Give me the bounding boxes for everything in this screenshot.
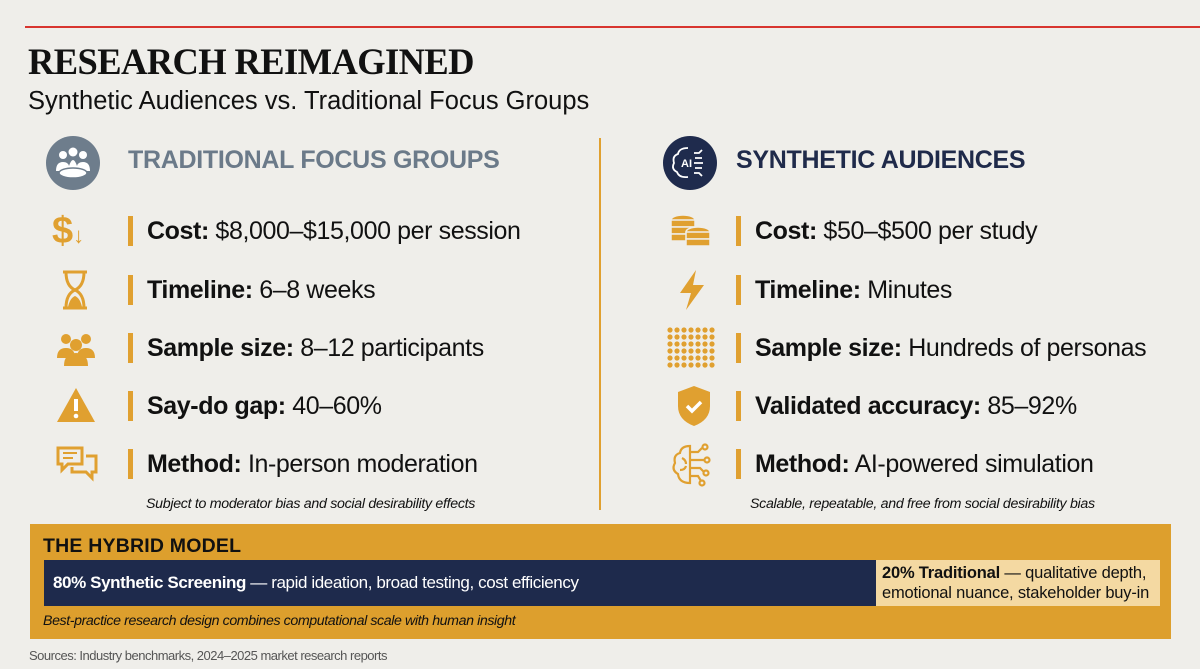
row: sample: Sample size: Hundreds of personas [755, 334, 1146, 362]
note: Best-practice research design combines computational scale with human insight [43, 613, 515, 629]
icon: people [46, 136, 100, 190]
icon: coins [672, 216, 710, 246]
icon: shield [678, 386, 710, 426]
icon: AI brain [663, 136, 717, 190]
bar: 20% traditional: 20% Traditional — qualitative depth, [882, 564, 1146, 582]
icon: brain circuit [672, 443, 711, 487]
row: method: Method: AI-powered simulation [755, 450, 1094, 478]
bar: 80% synthetic: 80% Synthetic Screening — rapid ideation, broad testing, cost efficiency [53, 573, 579, 592]
row: say-do: Say-do gap: 40–60% [147, 392, 382, 420]
sources: Sources: Industry benchmarks, 2024–2025 market research reports [29, 648, 387, 663]
panel: hybrid model [30, 524, 1171, 639]
note: Scalable, repeatable, and free from social desirability bias [750, 496, 1095, 512]
icon: dots [667, 327, 715, 368]
icon: chat [56, 446, 98, 482]
heading: THE HYBRID MODEL [43, 535, 241, 557]
divider [599, 138, 601, 510]
bar: 80% synthetic [44, 560, 876, 606]
row: timeline: Timeline: 6–8 weeks [147, 276, 375, 304]
icon: warning [57, 388, 95, 422]
icon: hourglass [63, 270, 87, 310]
note: Subject to moderator bias and social desirability effects [146, 496, 475, 512]
subtitle: Synthetic Audiences vs. Traditional Focus Groups [28, 87, 589, 115]
heading: SYNTHETIC AUDIENCES [736, 146, 1025, 174]
row: accuracy: Validated accuracy: 85–92% [755, 392, 1077, 420]
panel: traditional [46, 136, 521, 512]
icon: dollar: $↓ [52, 210, 84, 252]
icon: lightning [680, 270, 704, 310]
bar: 20% traditional: emotional nuance, stakeholder buy-in [882, 584, 1149, 602]
row: cost: Cost: $8,000–$15,000 per session [147, 216, 521, 244]
row: timeline: Timeline: Minutes [755, 276, 952, 304]
icon: group [57, 334, 95, 366]
bar: 20% traditional [876, 560, 1160, 606]
row: cost: Cost: $50–$500 per study [755, 216, 1037, 244]
row: method: Method: In-person moderation [147, 450, 478, 478]
panel: synthetic [663, 136, 1146, 512]
icon: AI brain: AI [681, 158, 692, 170]
heading: TRADITIONAL FOCUS GROUPS [128, 146, 500, 174]
title: RESEARCH REIMAGINED [28, 41, 474, 82]
row: sample: Sample size: 8–12 participants [147, 334, 484, 362]
